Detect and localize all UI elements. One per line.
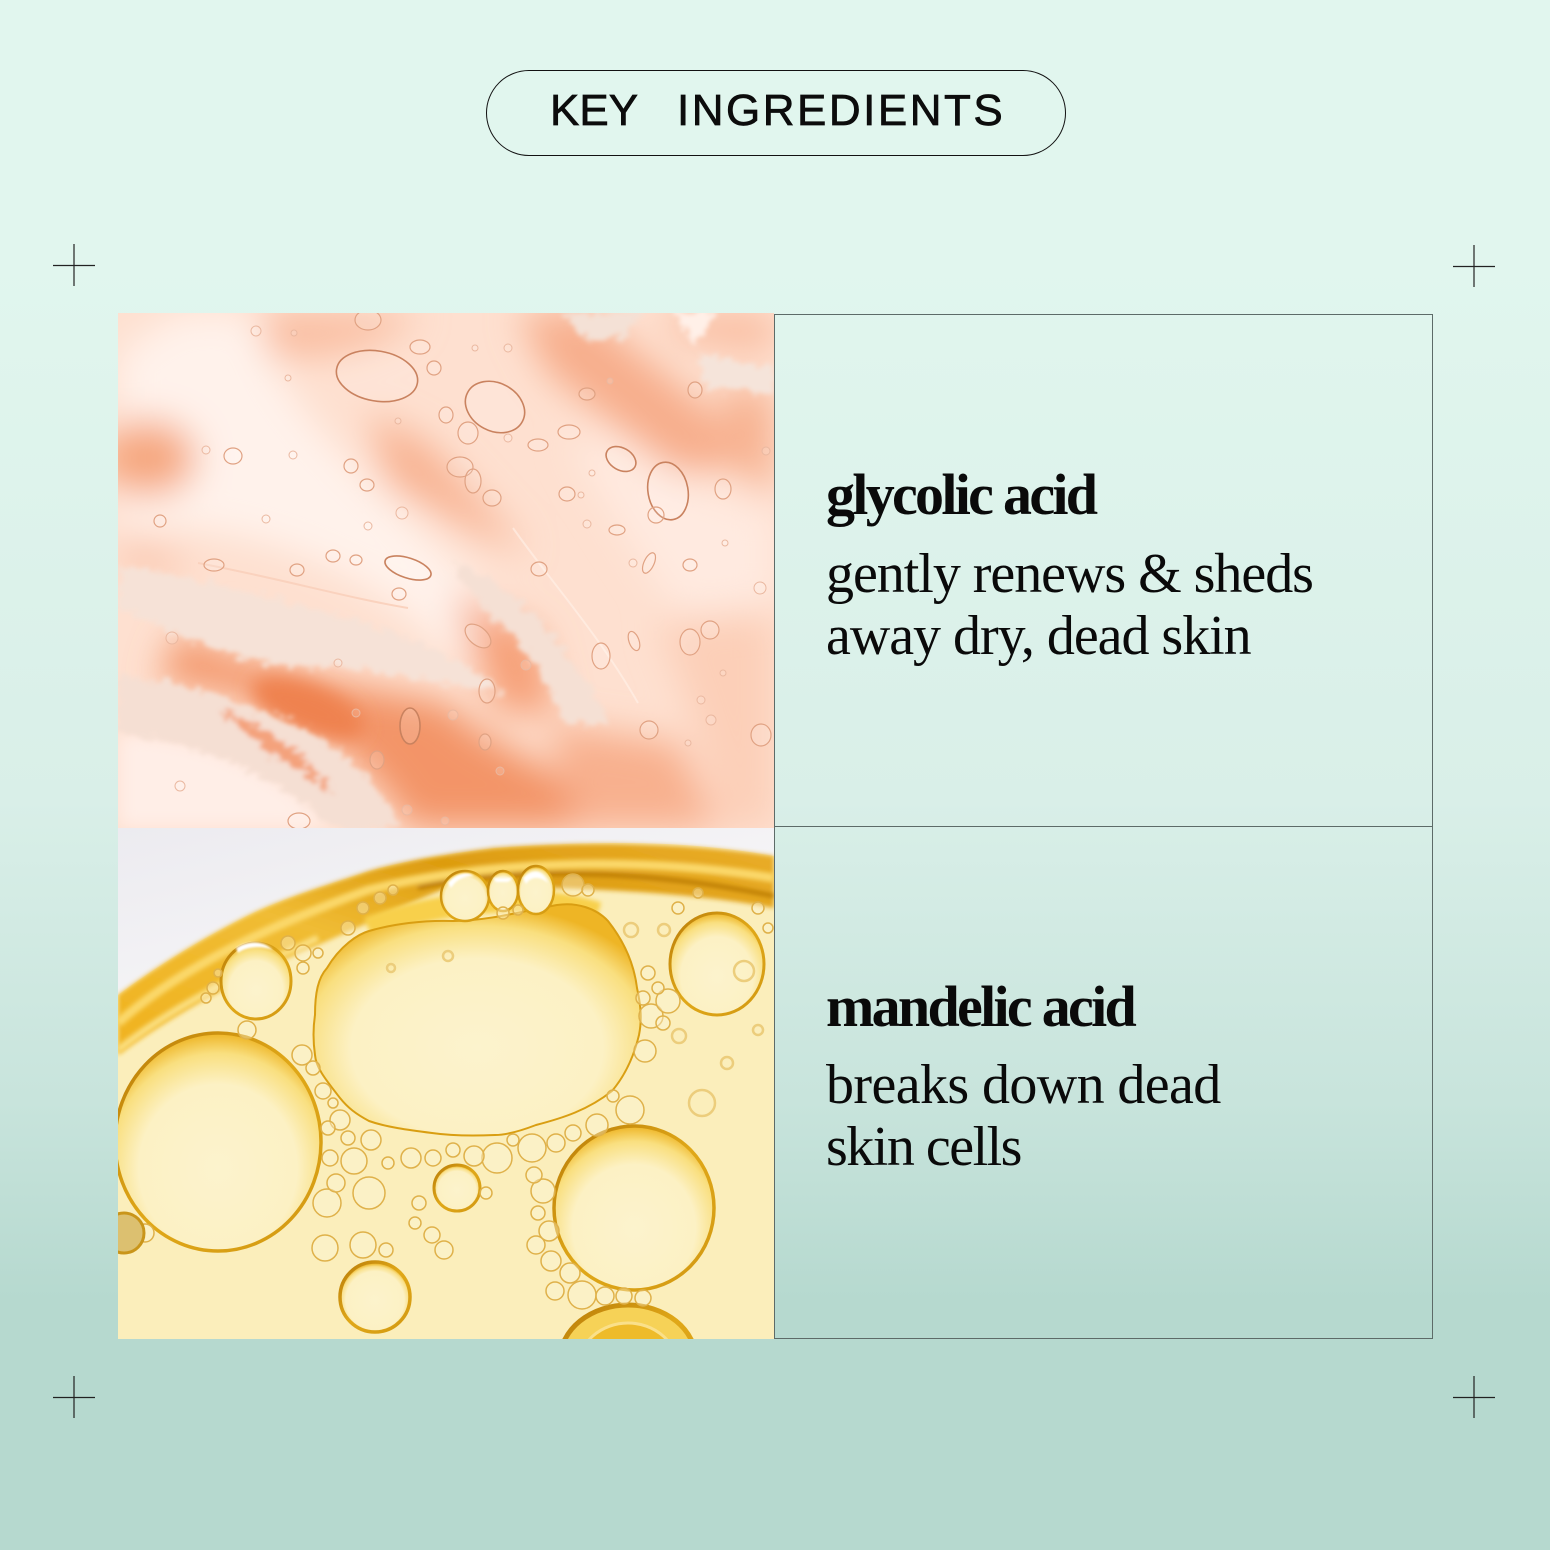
panel: mandelic acid: [774, 826, 1433, 1339]
title pill: INGREDIENTS: [677, 86, 1005, 135]
text: mandelic acid description: [826, 1054, 1221, 1178]
text: glycolic acid description: gently renews & sheds: [826, 543, 1313, 605]
heading: glycolic acid: glycolic acid: [826, 462, 1095, 527]
text: glycolic acid description: away dry, dead skin: [826, 605, 1251, 667]
panel: glycolic acid: [774, 314, 1433, 827]
text: glycolic acid description: [826, 543, 1313, 667]
text: mandelic acid description: skin cells: [826, 1116, 1021, 1178]
text: mandelic acid description: breaks down dead: [826, 1054, 1221, 1116]
photo: peach gel texture: [118, 313, 774, 828]
title pill: [486, 70, 1066, 156]
heading: mandelic acid: mandelic acid: [826, 974, 1134, 1039]
photo: golden oil bubbles: [118, 828, 774, 1339]
title pill: KEY: [550, 86, 638, 135]
